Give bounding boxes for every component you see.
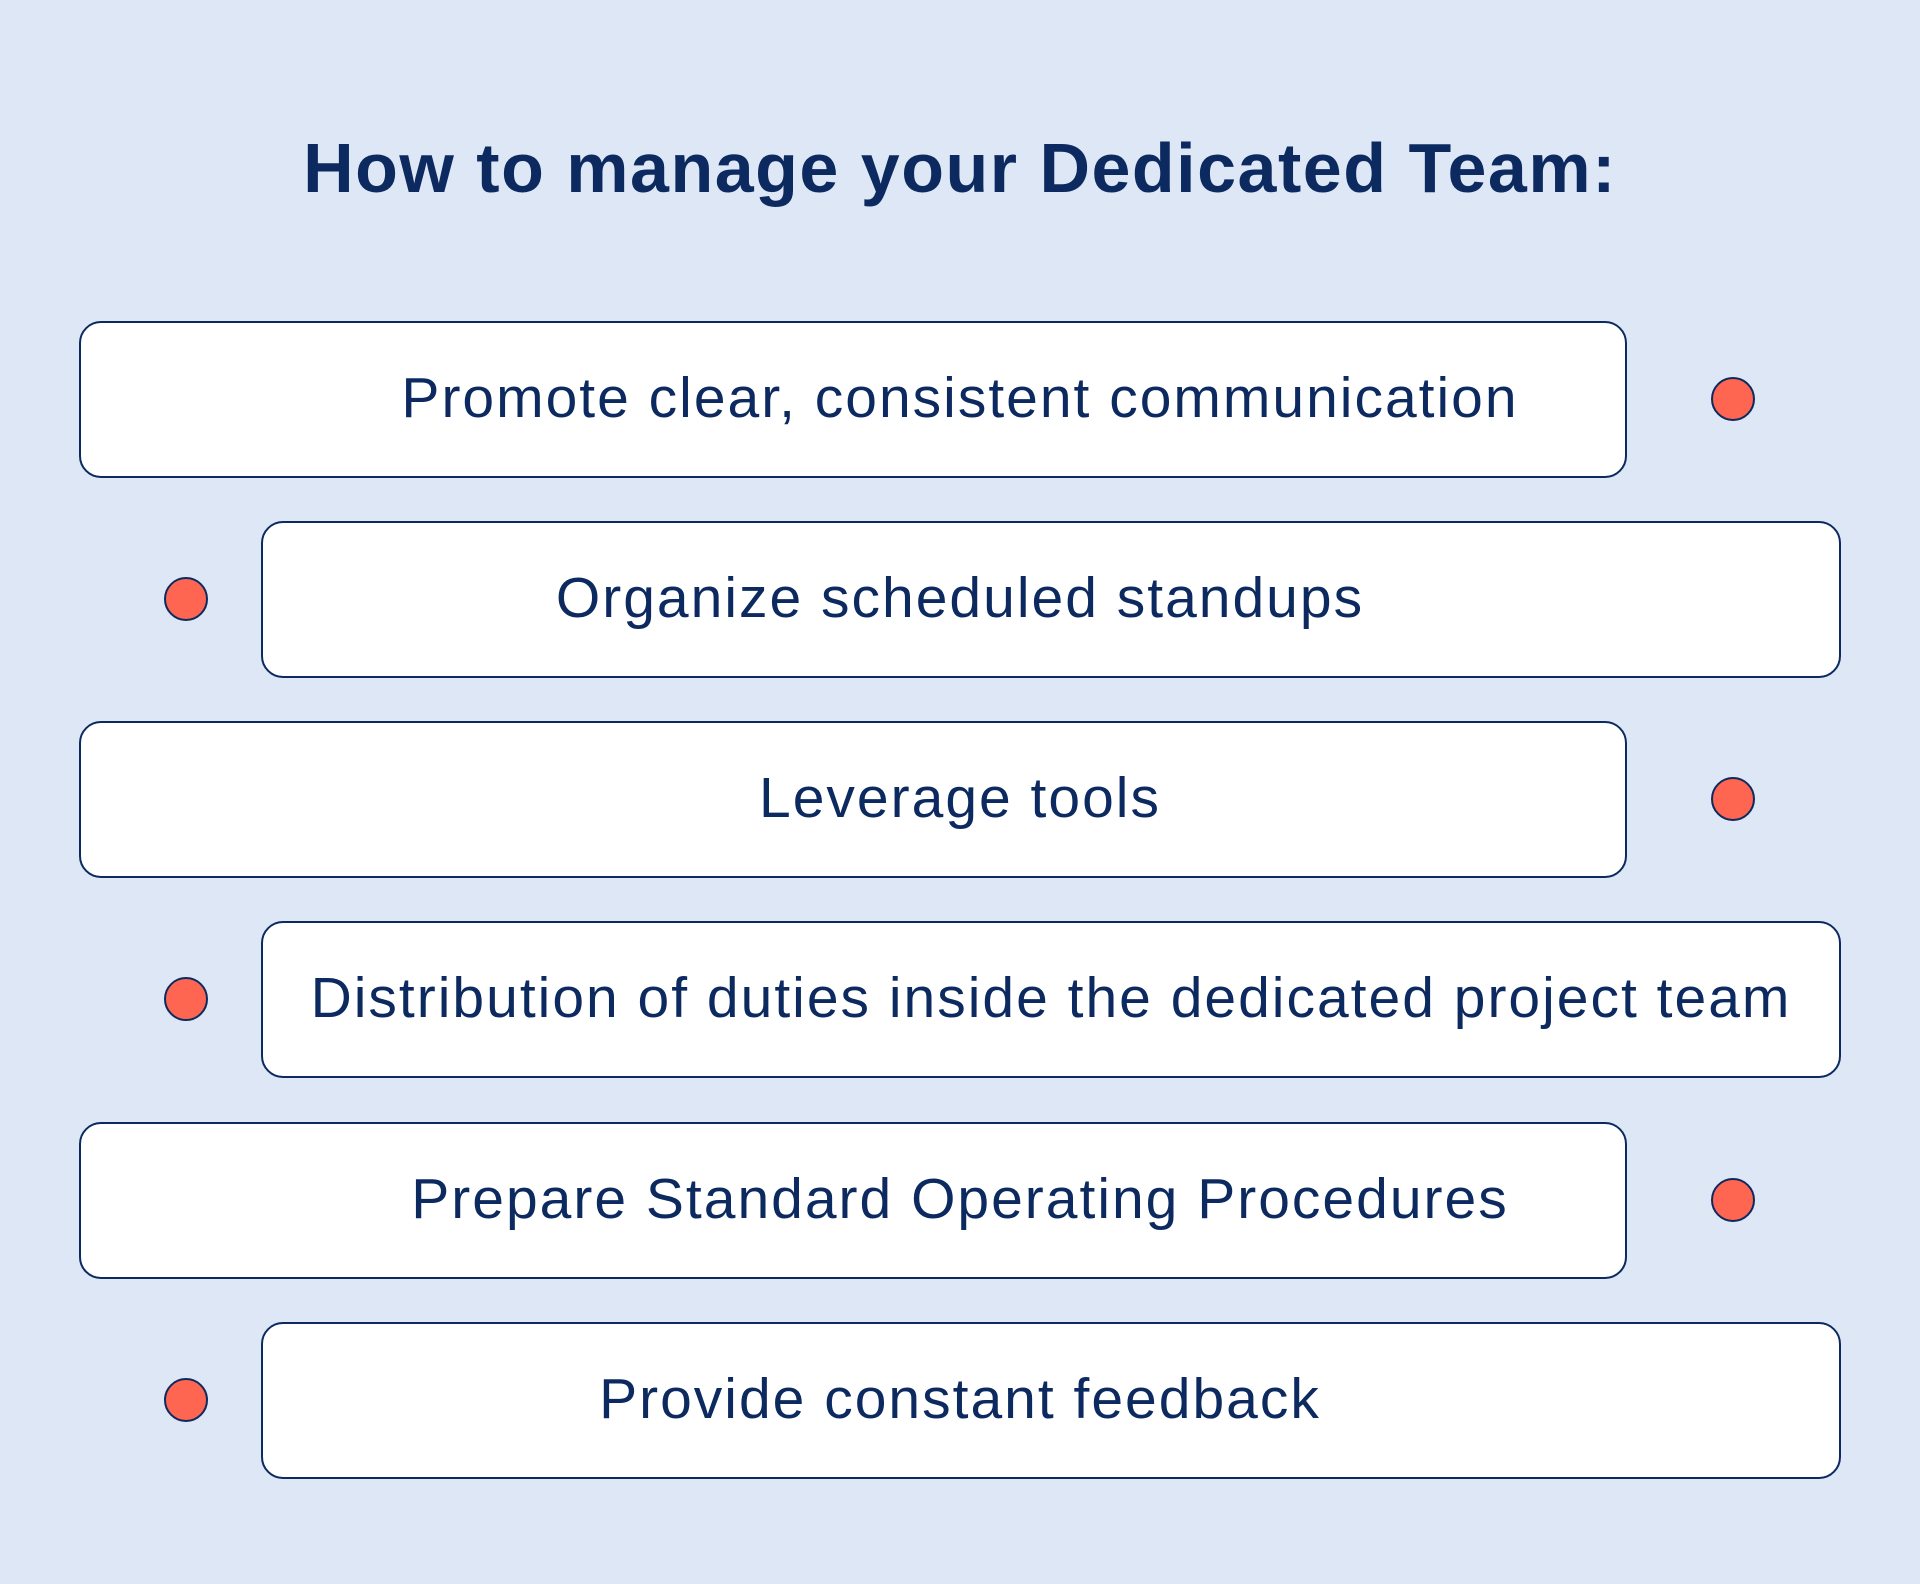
item 1 box [79,321,1627,478]
item 2 text: Organize scheduled standups [556,566,1364,630]
item 4 dot [164,977,208,1021]
item 1 dot [1711,377,1755,421]
item 1 text: Promote clear, consistent communication [401,366,1519,430]
item 3 box [79,721,1627,878]
item 6 dot [164,1378,208,1422]
item 6 text: Provide constant feedback [599,1367,1321,1431]
item 5 box [79,1122,1627,1279]
item 2 dot [164,577,208,621]
item 3 dot [1711,777,1755,821]
item 2 box [261,521,1841,678]
title: How to manage your Dedicated Team: [303,129,1617,207]
item 5 dot [1711,1178,1755,1222]
item 6 box [261,1322,1841,1479]
item 4 text: Distribution of duties inside the dedicated project team [311,966,1791,1030]
item 3 text: Leverage tools [759,766,1161,830]
item 4 box [261,921,1841,1078]
item 5 text: Prepare Standard Operating Procedures [411,1167,1509,1231]
